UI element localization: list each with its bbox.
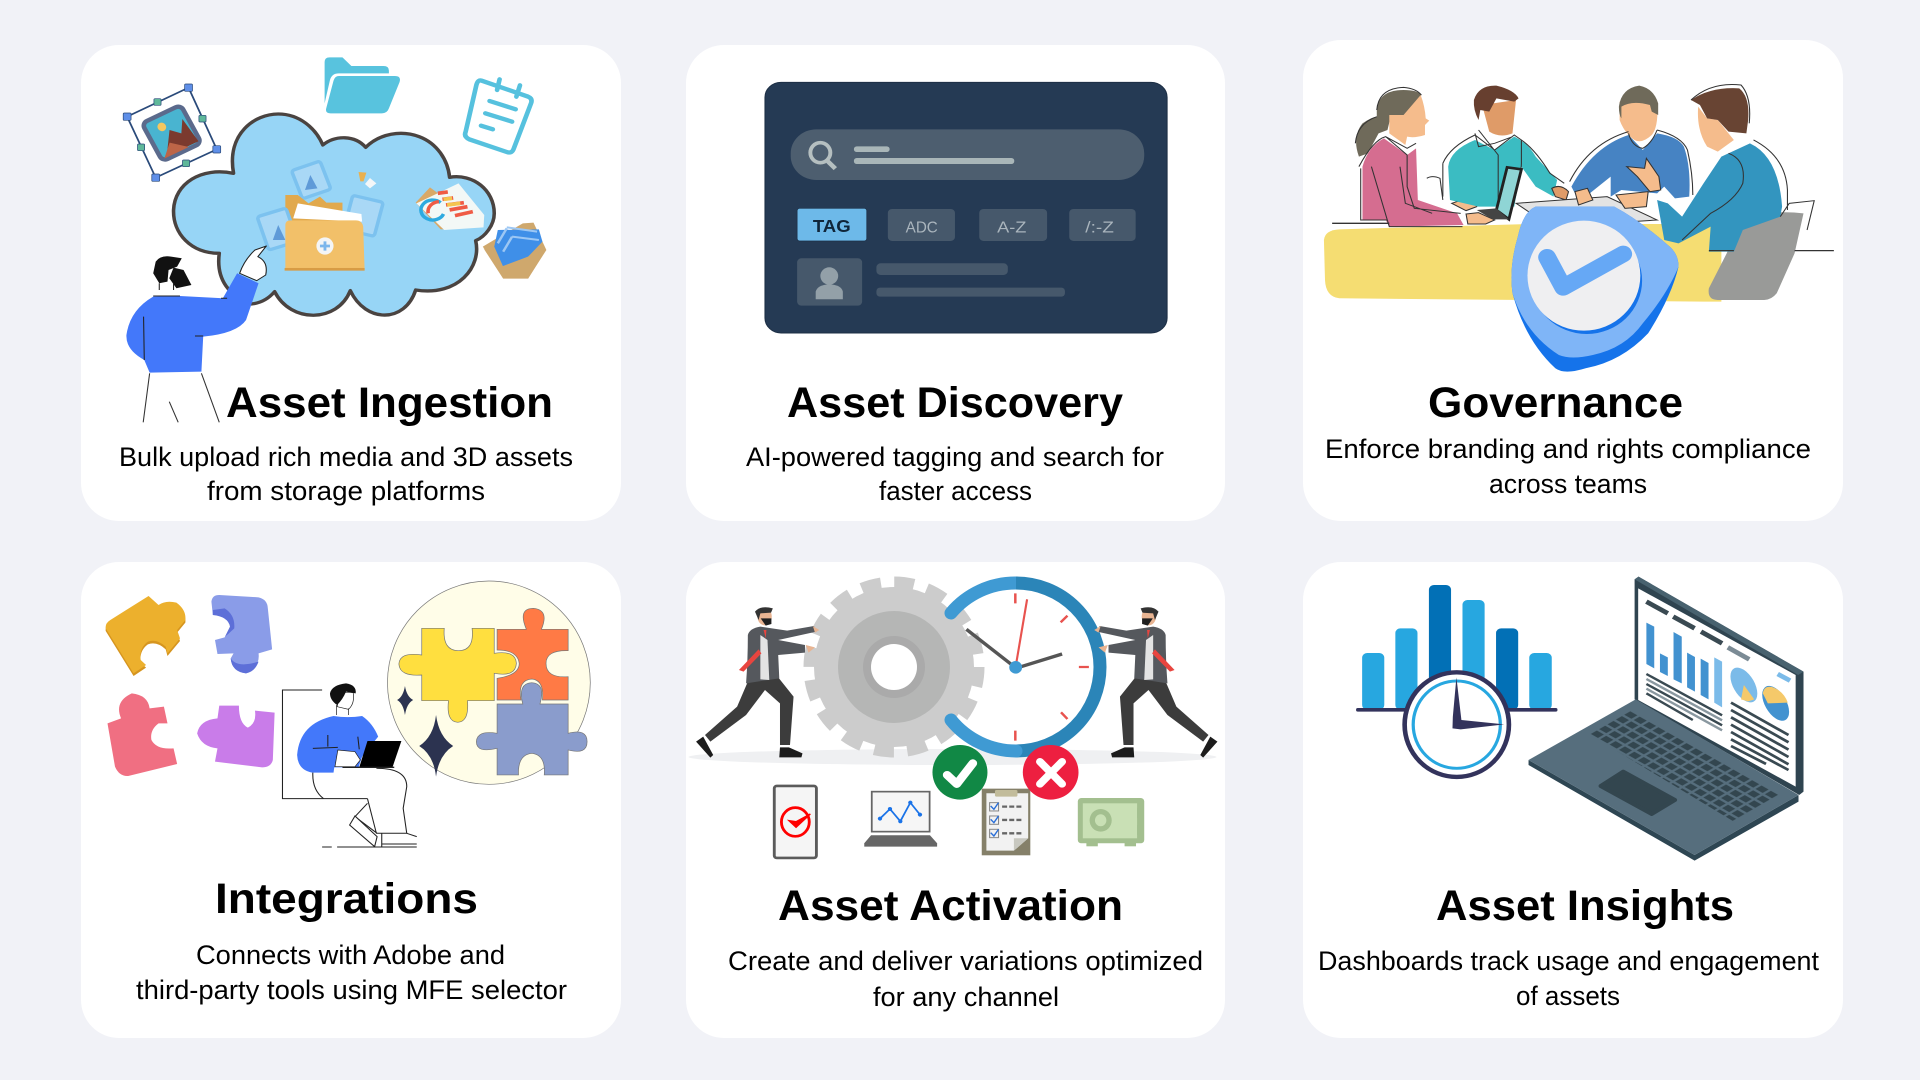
- description: [1325, 434, 1811, 499]
- description: [119, 442, 573, 506]
- person: man facing viewer: [1516, 86, 1693, 222]
- illustration: team meeting with shield: [1324, 84, 1834, 372]
- description: Enforce branding and rights compliance: [1325, 434, 1811, 464]
- icon: laptop dashboard: [1529, 577, 1804, 861]
- icon: phone: [774, 786, 816, 858]
- bar chart: [1356, 585, 1557, 712]
- icon: image in selection frame: [123, 84, 221, 181]
- tag filter chips: [797, 208, 1136, 241]
- icon: pink puzzle piece: [107, 693, 177, 776]
- panel: asset insights: [1303, 562, 1843, 1038]
- chair: [1709, 212, 1804, 300]
- illustration: puzzle integration scene: [106, 581, 590, 847]
- cloud: [174, 114, 494, 315]
- tag filter chips: TAG: [813, 216, 851, 236]
- description: from storage platforms: [207, 476, 485, 506]
- heading: Integrations: [215, 875, 478, 923]
- description: Create and deliver variations optimized: [728, 946, 1203, 976]
- heading: Governance: [1428, 379, 1683, 427]
- icon: box with blue files: [483, 223, 546, 279]
- description: [1318, 946, 1819, 1011]
- panel: integrations: [81, 562, 621, 1038]
- person: man with laptop: [1443, 86, 1569, 219]
- description: AI-powered tagging and search for: [746, 442, 1164, 472]
- description: across teams: [1489, 469, 1647, 499]
- description: Connects with Adobe and: [196, 940, 505, 970]
- panel: governance: [1303, 40, 1843, 521]
- ground shadow: [688, 749, 1216, 765]
- description: faster access: [879, 476, 1032, 506]
- dashboard headers: [1646, 602, 1722, 643]
- icon: shield with check: [1511, 207, 1679, 372]
- person with laptop: [282, 683, 417, 847]
- icon: checklist clipboard: [982, 789, 1030, 855]
- big circle with joined puzzle: [387, 581, 590, 784]
- dashboard bars: [1646, 623, 1722, 707]
- description: [728, 946, 1203, 1012]
- icon: clock and gear: [811, 582, 1101, 752]
- icon: yellow puzzle piece: [106, 596, 185, 676]
- dashboard text lines: [1646, 674, 1722, 725]
- search result row: [797, 258, 1065, 306]
- person: man from behind: [1332, 84, 1834, 252]
- icon: yellow folder with images: [257, 161, 383, 271]
- icon: blue puzzle piece: [211, 595, 272, 673]
- tag filter chips: ADC: [906, 220, 938, 237]
- panel: asset discovery: [686, 45, 1225, 521]
- description: third-party tools using MFE selector: [136, 975, 567, 1005]
- icon: laptop chart: [864, 792, 937, 847]
- icon: green check badge: [932, 745, 987, 800]
- heading: Asset Activation: [778, 882, 1123, 930]
- icon: purple puzzle piece: [197, 706, 275, 767]
- icon: report papers: [416, 183, 484, 230]
- illustration: cloud upload scene: [123, 57, 546, 422]
- description: [136, 940, 567, 1005]
- person: woman: [1355, 87, 1495, 227]
- icon: red cross badge: [1023, 745, 1079, 800]
- tag filter chips: A-Z: [997, 220, 1027, 237]
- panel: asset ingestion: [81, 45, 621, 521]
- icon: blue folder: [325, 57, 400, 113]
- heading: Asset Discovery: [787, 379, 1123, 427]
- heading: Asset Ingestion: [226, 379, 553, 427]
- illustration: search interface: [765, 82, 1167, 333]
- dashboard pie charts: [1725, 664, 1763, 706]
- person pushing clock: [1094, 607, 1217, 758]
- search bar: [791, 129, 1144, 180]
- icon: clock: [1405, 672, 1509, 777]
- icon: notepad: [465, 79, 532, 153]
- person pushing gear: [696, 607, 819, 758]
- tag filter chips: /:-Z: [1085, 220, 1114, 237]
- description: for any channel: [873, 982, 1059, 1012]
- description: Dashboards track usage and engagement: [1318, 946, 1819, 976]
- person pointing: [126, 246, 266, 422]
- row of channel icons: [774, 745, 1144, 858]
- panel: asset activation: [686, 562, 1225, 1038]
- illustration group: [1356, 577, 1804, 861]
- icon: safe: [1078, 798, 1144, 846]
- description: Bulk upload rich media and 3D assets: [119, 442, 573, 472]
- heading: Asset Insights: [1436, 882, 1734, 930]
- description: of assets: [1516, 981, 1620, 1011]
- table: [1324, 224, 1721, 302]
- description: [746, 442, 1164, 506]
